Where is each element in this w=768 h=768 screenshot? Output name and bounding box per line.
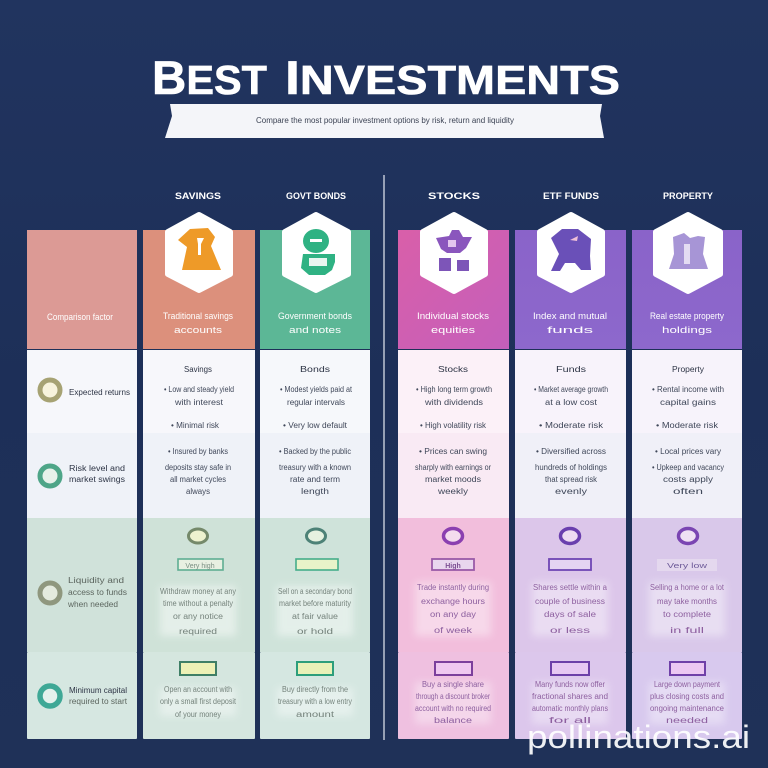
panel: column real estate: • Upkeep and vacancy bbox=[652, 463, 724, 472]
panel: column stocks: through a discount broker bbox=[416, 692, 490, 701]
tag: Very low bbox=[667, 561, 708, 570]
panel: column real estate: plus closing costs and bbox=[650, 692, 724, 701]
panel: column funds: • Diversified across bbox=[536, 447, 606, 456]
panel: column savings: only a small first deposit bbox=[160, 697, 237, 706]
tag: minimum bbox=[551, 662, 589, 675]
panel: column funds: automatic monthly plans bbox=[532, 704, 608, 713]
panel: column savings: Withdraw money at any bbox=[160, 587, 236, 596]
panel: column real estate bbox=[632, 191, 742, 739]
icon: ring bbox=[444, 528, 462, 544]
criterion: risk level: market swings bbox=[69, 475, 125, 484]
column label: STOCKS bbox=[428, 191, 480, 202]
criterion: expected returns bbox=[40, 380, 130, 400]
panel: column bonds: treasury with a known bbox=[279, 463, 351, 472]
title: INVESTMENTS bbox=[285, 51, 620, 104]
panel: column stocks: market moods bbox=[425, 475, 481, 484]
panel: column real estate: may take months bbox=[657, 597, 717, 606]
panel: column savings: • Minimal risk bbox=[171, 421, 220, 430]
panel: column stocks: Buy a single share bbox=[422, 680, 485, 689]
panel: column bonds: amount bbox=[296, 710, 335, 719]
column label: PROPERTY bbox=[663, 191, 714, 202]
panel: column real estate: often bbox=[673, 487, 703, 496]
panel: column savings: time without a penalty bbox=[163, 599, 233, 608]
icon: ring bbox=[306, 529, 326, 543]
tag bbox=[549, 559, 591, 570]
criterion: minimum investment: required to start bbox=[69, 697, 128, 706]
panel: column stocks: Stocks bbox=[438, 365, 468, 374]
panel: column bonds bbox=[260, 191, 370, 739]
panel: column bonds: • Modest yields paid at bbox=[280, 385, 353, 394]
icon: lavender hexagon badge bbox=[656, 215, 720, 291]
panel: column funds: evenly bbox=[555, 487, 587, 496]
panel: column savings: • Low and steady yield bbox=[164, 385, 234, 394]
panel: column funds: hundreds of holdings bbox=[535, 463, 607, 472]
panel: column real estate: costs apply bbox=[663, 475, 713, 484]
panel: column funds: Funds bbox=[556, 365, 586, 374]
tag bbox=[432, 559, 474, 570]
panel: column funds: • Market average growth bbox=[534, 385, 608, 394]
panel: column funds: Shares settle within a bbox=[533, 583, 608, 592]
tag: minimum bbox=[180, 662, 216, 675]
panel: column funds: • Moderate risk bbox=[539, 421, 604, 430]
panel: column real estate: capital gains bbox=[660, 398, 716, 407]
tag: Very high bbox=[185, 563, 215, 570]
panel: column savings: Open an account with bbox=[164, 685, 232, 694]
panel: column real estate: to complete bbox=[663, 610, 712, 619]
criterion: minimum investment bbox=[40, 686, 128, 706]
panel: column savings: Traditional savings bbox=[163, 311, 233, 322]
panel: column funds: or less bbox=[550, 626, 590, 635]
panel: column savings: or any notice bbox=[173, 612, 224, 621]
panel: column stocks: on any day bbox=[430, 610, 476, 619]
panel: column stocks: weekly bbox=[437, 487, 468, 496]
panel: column real estate: Large down payment bbox=[654, 680, 721, 689]
panel: column savings bbox=[143, 191, 255, 739]
title bbox=[152, 51, 620, 104]
panel: column bonds: length bbox=[301, 487, 329, 496]
criterion: liquidity: when needed bbox=[67, 600, 118, 609]
panel: column real estate: needed bbox=[666, 716, 708, 725]
panel: column savings: all market cycles bbox=[170, 475, 226, 484]
panel: column funds: couple of business bbox=[535, 597, 605, 606]
panel: column bonds: market before maturity bbox=[279, 599, 351, 608]
panel: column stocks: Trade instantly during bbox=[417, 583, 489, 592]
panel: column real estate: holdings bbox=[662, 325, 712, 336]
tag bbox=[178, 559, 223, 570]
icon: violet hexagon badge bbox=[540, 215, 602, 290]
panel: column stocks: sharply with earnings or bbox=[415, 463, 491, 472]
panel: column bonds: regular intervals bbox=[287, 398, 345, 407]
panel: column bonds: • Very low default bbox=[283, 421, 348, 430]
criterion: risk level: Risk level and bbox=[69, 464, 125, 473]
panel: column bonds: or hold bbox=[297, 627, 333, 636]
icon: ring bbox=[560, 528, 580, 544]
tag: minimum bbox=[297, 662, 333, 675]
panel: column funds: Index and mutual bbox=[533, 311, 607, 322]
panel: column real estate: in full bbox=[670, 626, 704, 635]
tag bbox=[296, 559, 338, 570]
panel: column savings: of your money bbox=[175, 710, 221, 719]
subtitle banner bbox=[165, 104, 604, 138]
title: BEST bbox=[152, 51, 267, 104]
criterion: expected returns: Expected returns bbox=[69, 388, 130, 397]
tag: minimum bbox=[670, 662, 705, 675]
panel: column savings: Savings bbox=[184, 365, 212, 374]
column label: GOVT BONDS bbox=[286, 191, 346, 202]
panel: column bonds: Buy directly from the bbox=[282, 685, 348, 694]
tag: High bbox=[445, 563, 461, 570]
panel: column funds: days of sale bbox=[544, 610, 597, 619]
icon: ring bbox=[678, 528, 698, 544]
panel: column funds: at a low cost bbox=[545, 398, 598, 407]
icon: orange hexagon badge bbox=[168, 215, 230, 290]
panel: column stocks bbox=[398, 191, 509, 739]
criteria header: Comparison factor bbox=[47, 312, 113, 323]
panel: column savings: always bbox=[186, 487, 210, 496]
panel: column real estate: Selling a home or a lot bbox=[650, 583, 725, 592]
panel: column savings: required bbox=[179, 627, 217, 636]
divider bbox=[383, 175, 385, 740]
tag bbox=[657, 559, 717, 571]
panel: column savings: accounts bbox=[174, 325, 222, 336]
panel: column funds: for all bbox=[549, 716, 591, 725]
panel: column stocks: of week bbox=[434, 626, 473, 635]
panel: column real estate: • Local prices vary bbox=[655, 447, 721, 456]
panel: column bonds: rate and term bbox=[290, 475, 340, 484]
column label: SAVINGS bbox=[175, 191, 221, 202]
panel: column stocks: • High long term growth bbox=[416, 385, 492, 394]
subtitle banner: Compare the most popular investment options by risk, return and liquidity bbox=[256, 116, 514, 125]
panel: criteria column bbox=[27, 230, 137, 739]
panel: column funds: Many funds now offer bbox=[535, 680, 605, 689]
panel: column real estate: ongoing maintenance bbox=[650, 704, 725, 713]
panel: column bonds: and notes bbox=[289, 325, 341, 336]
panel: column stocks: • Prices can swing bbox=[419, 447, 487, 456]
panel: column real estate: Real estate property bbox=[650, 311, 724, 322]
criterion: liquidity bbox=[40, 576, 127, 609]
panel: column savings: • Insured by banks bbox=[168, 447, 228, 456]
panel: column stocks: Individual stocks bbox=[417, 311, 489, 322]
criterion: risk level bbox=[40, 464, 125, 486]
criterion: liquidity: access to funds bbox=[68, 588, 127, 597]
panel: column bonds: Government bonds bbox=[278, 311, 352, 322]
column label: ETF FUNDS bbox=[543, 191, 599, 202]
panel: column bonds: Sell on a secondary bond bbox=[278, 587, 352, 596]
panel: column bonds: Bonds bbox=[300, 365, 330, 374]
panel: column savings: deposits stay safe in bbox=[165, 463, 231, 472]
panel: column real estate: • Rental income with bbox=[652, 385, 724, 394]
icon: ring bbox=[188, 529, 208, 543]
panel: column stocks: • High volatility risk bbox=[420, 421, 487, 430]
panel: column stocks: with dividends bbox=[424, 398, 483, 407]
criterion: liquidity: Liquidity and bbox=[68, 576, 124, 585]
panel: column funds bbox=[515, 191, 626, 739]
tag: minimum bbox=[435, 662, 472, 675]
panel: column real estate: Property bbox=[672, 365, 704, 374]
panel: column funds: that spread risk bbox=[545, 475, 598, 484]
panel: column bonds: at fair value bbox=[292, 612, 339, 621]
panel: column bonds: • Backed by the public bbox=[279, 447, 351, 456]
panel: column funds: funds bbox=[547, 325, 593, 336]
panel: column stocks: account with no required bbox=[415, 704, 491, 713]
panel: column stocks: exchange hours bbox=[421, 597, 485, 606]
panel: column bonds: treasury with a low entry bbox=[278, 697, 352, 706]
criterion: minimum investment: Minimum capital bbox=[69, 686, 127, 695]
icon: magenta hexagon badge bbox=[423, 215, 485, 291]
panel: column savings: with interest bbox=[174, 398, 224, 407]
criteria header bbox=[27, 230, 137, 349]
panel: column real estate: • Moderate risk bbox=[656, 421, 719, 430]
icon: green hexagon badge bbox=[285, 215, 348, 290]
panel: column stocks: balance bbox=[434, 716, 473, 725]
panel: column funds: fractional shares and bbox=[532, 692, 608, 701]
watermark: pollinations.ai bbox=[527, 719, 750, 755]
panel: column stocks: equities bbox=[431, 325, 475, 336]
